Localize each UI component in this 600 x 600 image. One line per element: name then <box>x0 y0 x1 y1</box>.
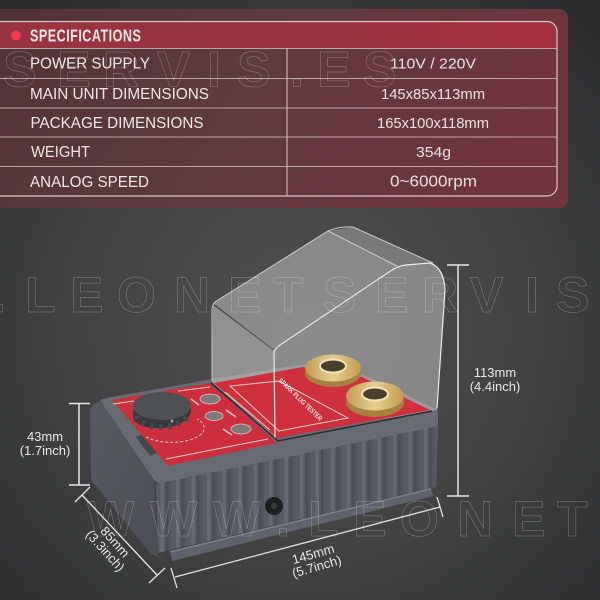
spec values: 110V / 220V <box>390 56 476 72</box>
panel: specifications <box>0 9 568 208</box>
depth label: 85mm <box>97 524 133 560</box>
width label: 145mm <box>290 541 336 567</box>
transparent cover <box>212 227 445 437</box>
red sensor plate <box>211 367 432 441</box>
spec labels: WEIGHT <box>31 144 90 161</box>
height label: 43mm <box>27 429 63 444</box>
base front ribbed face <box>156 426 438 553</box>
watermark row 1: SERVIS.ES <box>3 42 396 98</box>
spec labels: POWER SUPPLY <box>30 56 150 72</box>
plate markings <box>225 381 348 431</box>
plate groove <box>211 383 432 441</box>
width bracket <box>171 497 443 588</box>
power jack <box>265 497 283 515</box>
adjustment knob <box>133 392 191 428</box>
depth label: (3.3inch) <box>83 527 128 574</box>
indicator lamps <box>200 394 251 434</box>
cover height label: 113mm <box>474 365 516 380</box>
device illustration <box>90 227 445 562</box>
red control plate <box>112 383 277 466</box>
table frame and grid <box>0 22 557 196</box>
spec labels: ANALOG SPEED <box>30 174 149 191</box>
spec values: 0~6000rpm <box>390 174 477 190</box>
terminal: front <box>346 382 404 417</box>
status dot <box>11 30 21 40</box>
cover height bracket <box>447 265 469 496</box>
plate slots <box>191 399 236 435</box>
base top bevel <box>100 364 438 484</box>
width label: (5.7inch) <box>290 552 343 581</box>
height bracket <box>69 403 90 485</box>
dimension: height 113mm <box>447 265 520 496</box>
spec values: 354g <box>416 144 451 161</box>
base left side face <box>90 401 168 562</box>
depth bracket <box>75 487 165 583</box>
spec labels: MAIN UNIT DIMENSIONS <box>30 86 209 103</box>
table header band <box>0 22 557 48</box>
spec values: 145x85x113mm <box>381 86 485 103</box>
side notch under knob <box>136 433 160 456</box>
spec values <box>377 56 489 190</box>
terminal: rear <box>305 354 361 387</box>
plate markings <box>113 387 268 459</box>
cover edge highlights <box>212 227 445 437</box>
height label: (1.7inch) <box>20 443 70 458</box>
watermark row 2: .LEONETSERVIS <box>0 267 589 323</box>
brass terminals <box>305 354 404 417</box>
cover end face <box>212 305 275 437</box>
dimension: width 145mm <box>171 497 443 588</box>
spec labels: PACKAGE DIMENSIONS <box>30 115 204 132</box>
cover height label: (4.4inch) <box>470 379 520 394</box>
dimension: depth 85mm <box>75 487 165 583</box>
cover roof <box>213 231 397 349</box>
cover long face <box>273 263 445 437</box>
spec labels <box>30 56 209 191</box>
dimension: height 43mm <box>20 403 90 485</box>
front lip highlight <box>170 489 431 552</box>
panel backdrop <box>0 9 568 208</box>
heading: SPECIFICATIONS <box>30 27 141 46</box>
spec values: 165x100x118mm <box>377 115 489 132</box>
cover rear top <box>328 227 433 266</box>
watermark row 3: WWW.LEONET <box>87 491 588 547</box>
plate label: SPARK PLUG TESTER <box>277 377 323 423</box>
front lip <box>170 488 433 561</box>
